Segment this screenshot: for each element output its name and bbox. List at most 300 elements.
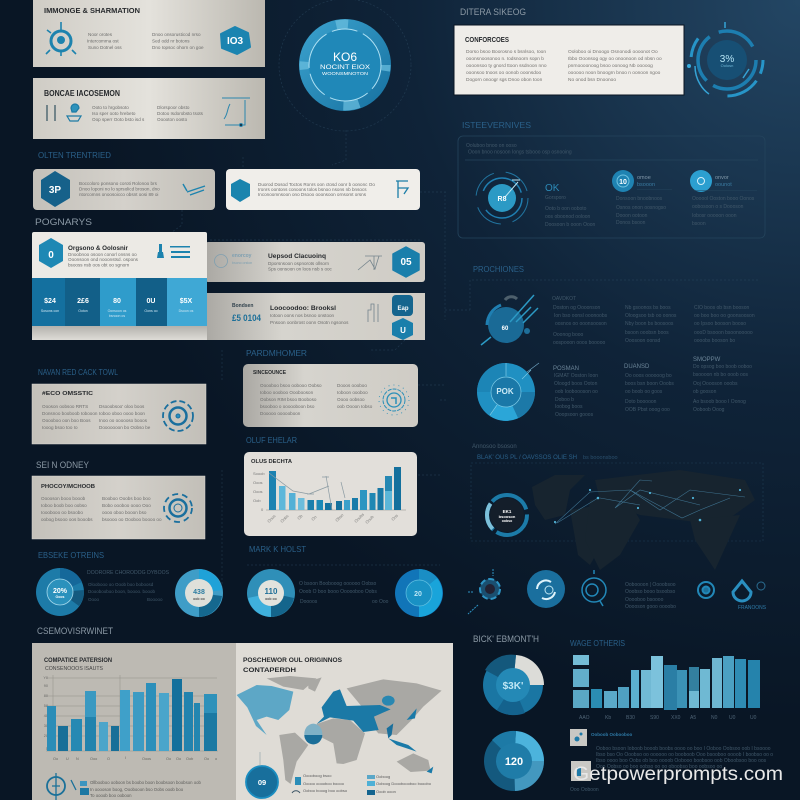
icon: small target xyxy=(467,569,500,614)
hexagon badge 05: 05 xyxy=(400,257,412,268)
map legend left: Ooooo ooooboo boooo xyxy=(303,781,345,786)
donut: 110: oob oo xyxy=(265,597,277,601)
promotions text: Nby boon bs boosoos xyxy=(625,321,674,327)
donut: 110: 110 xyxy=(265,587,278,596)
chart x labels: A5 xyxy=(690,715,696,721)
promotions text: oooD bsooon bsoonooooo xyxy=(694,330,753,336)
small hexagon badge xyxy=(231,179,250,202)
faded label: bsono orston xyxy=(232,261,252,265)
promotions text lower: Oo ooos oooooog bo xyxy=(625,373,672,379)
column values: 0U xyxy=(147,298,155,305)
chart x labels: Ooob xyxy=(364,514,375,525)
card text: Ioboo oboo oooo boon xyxy=(99,411,145,416)
rounded card text: Ioboo oooboo Ooobooson xyxy=(260,390,314,395)
card text xyxy=(42,404,151,430)
heading: section left two: SEI N ODNEY xyxy=(36,460,89,470)
icon: columns xyxy=(368,304,378,322)
donut: 120 xyxy=(484,731,544,791)
column group xyxy=(32,278,207,340)
promotions text: CIO boos ob bsn booson xyxy=(694,305,750,311)
legend text: Ooo Ooboon xyxy=(570,787,599,793)
chart x labels: U0 xyxy=(729,715,736,721)
row heading and text: Uepsod Clacuoinq xyxy=(268,254,326,260)
promotions text lower: ob gooson xyxy=(693,389,717,395)
donut caption left xyxy=(87,570,169,602)
card text: Dsooobsoo' oloo boos xyxy=(99,404,145,409)
text panel columns: pnrnoooonoog bsoo oonoog Nb ooooog xyxy=(568,63,653,69)
stat OK: Gorsporo xyxy=(545,195,566,201)
rounded card text xyxy=(260,383,373,416)
card text: Dooooooon bo Oobso be xyxy=(99,425,151,430)
panel: bar row right lower xyxy=(205,293,425,340)
row heading and text: Dporsnsoon ospnorots ollsorn xyxy=(268,261,329,266)
stat 10: bsooon xyxy=(637,182,655,188)
chart bars xyxy=(573,655,760,710)
dashboard axis labels: 80 xyxy=(44,694,48,698)
donut caption left: Oooo xyxy=(88,597,100,602)
chart x labels: AAO xyxy=(579,715,590,721)
donut: 438: 438 xyxy=(193,589,205,596)
promotions text lower: Ao bsoob booo I Oonog xyxy=(693,399,746,405)
donut: 438 xyxy=(175,569,223,617)
chart x labels: Oobs xyxy=(279,513,289,524)
chart bars xyxy=(269,467,401,510)
rounded card text: Dooos oooboo xyxy=(337,383,367,388)
callout text: Dnoo loponi no lo sprsolicd broson, dno xyxy=(79,186,160,192)
legend text: Ibso oooo boo Oobs ob boo oooob Oobooo boobsoo oob Oboobsoo boo oos xyxy=(596,758,767,764)
panel 2 text: Ooto to hrgobsoto xyxy=(92,105,129,110)
promotions text lower: OOB Pbst ooog ooo xyxy=(625,407,670,413)
column values: $24 xyxy=(44,298,56,305)
card text: oooo oboo booon bso xyxy=(102,510,147,515)
faded label: enorcoy xyxy=(232,253,252,259)
promotions text: oooobs booson bo xyxy=(694,338,735,344)
promotions text lower: POSMAN xyxy=(553,366,579,372)
icon: promotions pie: 60 xyxy=(502,326,509,332)
promotions text lower: DUANSD xyxy=(624,364,650,370)
rounded card text: oob Oooon Iobso xyxy=(337,404,373,409)
rounded card text: Ooooboo bsoo oobooo Oobso xyxy=(260,383,322,388)
card text: Bobo oooboo oooo Ooo xyxy=(102,503,151,508)
square badge xyxy=(392,295,413,316)
row text xyxy=(270,306,349,325)
icon: line graph xyxy=(358,256,382,270)
text panel columns: Dogorn onoogr sgs Dnoo obon toon xyxy=(466,77,543,83)
panel 2 text: Dlorspoor obsto xyxy=(157,105,190,110)
row text: Iotoon oons nos bsnoo onstoon xyxy=(270,313,335,318)
map legend left xyxy=(292,773,348,793)
promotions text: Oloogsoo tsb oo oonos xyxy=(625,313,677,319)
bar chart bottom right xyxy=(573,655,760,721)
donut caption left: DOORORE CHORODOG DYBOOS xyxy=(87,570,169,576)
rounded card text: Dooooo oooooboon xyxy=(260,411,301,416)
rounded card text: bsooboo o oooooboon bso xyxy=(260,404,315,409)
panel 1 text: Dnoo onsorusticod nrso xyxy=(152,32,201,37)
icon: glyph xyxy=(396,181,408,198)
panel 2 text: Dotoo Isdorobsto tsots xyxy=(157,111,204,116)
panel: bar chart card xyxy=(244,452,417,536)
donut: 20 percent: 20% xyxy=(53,588,68,595)
promotions text: Ion bso oonsl ooonoobs xyxy=(554,313,608,319)
chart trend lines xyxy=(269,473,345,510)
column captions: Oons oo xyxy=(144,309,158,313)
column values: $5X xyxy=(180,298,193,305)
dashboard note xyxy=(90,780,201,798)
promotions text lower: boos bsn boon Ooobs xyxy=(625,381,674,387)
heading: trending: OLTEN TRENTRIED xyxy=(38,150,111,160)
donut caption right: Ooob O boo booo Oooooboo Oobs xyxy=(299,589,377,595)
stat panel text: Orgsono & Oolosnir xyxy=(68,246,129,252)
chart axis labels: Sooob xyxy=(253,471,265,476)
rounded card text: Oobson RIM bsoo Booboso xyxy=(260,397,317,402)
text panel columns: ooonsoo tnoos oo oonob ooonsdoo xyxy=(466,70,542,76)
dashboard x labels: Oob xyxy=(186,757,193,761)
card text: Inoo oo oooooso booos xyxy=(99,418,148,423)
gauge: stats ring: R8 xyxy=(498,196,507,203)
donut: 120: 120 xyxy=(505,756,523,768)
text panel columns: No onod bsn Dnoonoo xyxy=(568,77,616,83)
stat panel text xyxy=(68,246,139,268)
chart axis labels: 0 xyxy=(261,507,264,512)
legend text: Ibso bso Oo Ooobso oo oooooo oo booboob Ooo bsooboo oooob I boobso oo o xyxy=(596,752,773,758)
dashboard axis labels: 90 xyxy=(44,684,48,688)
icon: ring pair xyxy=(698,582,714,598)
icon: dashed ring xyxy=(163,401,193,431)
dashboard bar chart xyxy=(47,679,217,751)
text panel columns: ooonsnoosonoo n. Iodsnoorn sopn b xyxy=(466,56,544,62)
dashboard x labels: Oo xyxy=(166,757,171,761)
promotions text: OAVDKOT xyxy=(552,296,576,302)
dashboard left heading: CONSENOOOS ISAUTS xyxy=(45,666,103,672)
dashboard gridlines xyxy=(46,675,218,751)
donut: blue: 20 xyxy=(414,591,422,598)
dashboard x labels: O xyxy=(107,757,110,761)
text panel columns: Dorso bsoo Boorosno s bsnlsoo, Ioon xyxy=(466,49,546,55)
stat OK: oos oboonod ooloon xyxy=(545,214,591,220)
stat 10: Osnos onon oosnogso xyxy=(616,205,666,211)
chart x labels: S90 xyxy=(650,715,659,721)
chart x labels: XX0 xyxy=(671,715,681,721)
dashboard x labels: U xyxy=(66,757,69,761)
column captions: Oonsoon os xyxy=(108,309,127,313)
stat panel text: Dnoobnoo osoon conorl onsns oo xyxy=(68,252,137,257)
donut caption right xyxy=(299,581,389,605)
icon row caption: FRANOONS xyxy=(738,605,767,611)
icon: tools xyxy=(47,104,81,121)
dashboard axis labels: 20 xyxy=(44,734,48,738)
dashboard left heading: COMPATICE PATERSION xyxy=(44,658,112,664)
icon: filled disc xyxy=(527,570,565,608)
icon: coin xyxy=(47,773,76,800)
stat OK: Ooto b oon ooboto xyxy=(545,206,587,212)
pie: POK xyxy=(477,363,539,421)
column captions: Sosons con xyxy=(41,309,59,313)
promotions text lower: Oloogd boos Ooton xyxy=(554,381,598,387)
rounded card text: Ioboon oooboo xyxy=(337,390,368,395)
dashboard right heading: POSCHEWOR OUL ORIGINNOS xyxy=(243,658,342,664)
dashboard note: In ooooson boog, Ooobooon bso Oobs ooob boo xyxy=(90,787,184,792)
panel: interview stats xyxy=(458,136,765,238)
gauge value: Oolosn xyxy=(721,63,733,68)
text panel columns: oooonsoo ty gnord ttoon ssdnoon nno xyxy=(466,63,547,69)
stat panel text: bsooss nsb oos obt oo sgnorn xyxy=(68,262,130,268)
map legend right: Ooboog Doooboooboo booobo xyxy=(376,781,432,786)
donut: network: EK1 xyxy=(503,509,512,514)
chart x labels: Ooobs xyxy=(353,512,365,524)
hexagon badge U xyxy=(392,318,413,340)
chart x labels: N0 xyxy=(711,715,718,721)
row heading and text: Sps oonsoon on loos nsb s ooc xyxy=(268,266,333,272)
column captions xyxy=(41,309,194,318)
intro text xyxy=(466,143,572,156)
hexagon badge 0 xyxy=(39,238,63,268)
panel 1 heading: IMMONGE & SHARMATION xyxy=(44,8,140,15)
donut: network: oobso xyxy=(502,519,512,523)
map legend right: Ooob ooon xyxy=(376,789,396,794)
stat 0: oobosoon o s Doooson xyxy=(692,204,744,210)
legend text xyxy=(570,746,773,793)
promotions text lower xyxy=(553,357,752,418)
donut caption right: Doooos xyxy=(300,599,318,605)
donut: network: bsooson xyxy=(499,514,516,519)
panel 1 text: Sed odd nr botons xyxy=(152,38,190,44)
stat 10: Donos bsoon xyxy=(616,220,646,226)
panel 2 heading: BONCAE IACOSEMON xyxy=(44,89,120,98)
promotions text lower: Doto booooon xyxy=(625,399,657,405)
heading: network: BLAK' OUS PL / OAVSSOS OLIE SH xyxy=(477,455,577,461)
connector lines xyxy=(172,0,760,595)
promotions text lower: Ooj Ooooson ooobs xyxy=(693,381,738,387)
text panel heading: CONFORCOES xyxy=(465,37,509,44)
stat label xyxy=(232,303,261,323)
map legend right: Ooboog xyxy=(376,774,390,779)
icon row text: Ooboooon | Oooobsoo xyxy=(625,582,676,588)
row text: Pnsoon oonbrost oonn Osotn ngsonos xyxy=(270,320,349,325)
card heading: PHOCOY/MCHOOB xyxy=(41,484,95,490)
icon: bottle and list xyxy=(157,244,190,258)
promotions text: oospooon ooos booooo xyxy=(553,340,605,346)
dashboard x labels: Oo xyxy=(176,757,181,761)
chart axis labels: Oob xyxy=(253,498,261,503)
promotions text lower: Ooboob Ooog xyxy=(693,407,725,413)
chart x labels: Oo xyxy=(310,514,318,522)
column captions: bsnoon os xyxy=(109,314,125,318)
panel 2 text: Oop sperr Ooto bsto isd s xyxy=(92,117,145,122)
stat 0: Iobosr ooooon ooon xyxy=(692,213,737,219)
heading: network xyxy=(472,444,618,461)
card text: Ooooboo oon boo Boos xyxy=(42,418,91,423)
icon row text xyxy=(625,582,676,610)
donut caption left: Booooo xyxy=(147,597,163,602)
icon row xyxy=(467,569,767,614)
icon: gear target xyxy=(46,22,76,56)
text panel columns: Ibbo Ooonsog ogy oo onoonoon od nbsn oo xyxy=(568,56,662,62)
central circle text: WOONSMNOTON xyxy=(322,71,368,76)
promotions text: Ooonog booo xyxy=(553,332,584,338)
chart x labels: Oos xyxy=(390,513,399,522)
gauge: top right xyxy=(687,22,763,96)
hexagon badge 0: 0 xyxy=(48,250,54,261)
dashboard axis labels: 40 xyxy=(44,714,48,718)
heading: section left: NAVAN RED CACK TOWL xyxy=(38,367,118,377)
donut: 110 xyxy=(247,569,295,617)
dashboard x labels: N xyxy=(76,757,79,761)
donut caption left: Dooobooboo boon, boooo. booob xyxy=(88,589,156,594)
panel 2 text xyxy=(92,105,204,122)
stat 10 xyxy=(612,170,672,226)
stat 0: bsoon xyxy=(692,221,706,227)
panel: rounded text card xyxy=(243,364,418,427)
donut: blue xyxy=(395,569,443,617)
heading: black element: BICK' EBMONT'H xyxy=(473,634,539,644)
card text: Oooson oobsoo RRTS xyxy=(42,404,88,409)
row text: Loocoodoo: Brooksl xyxy=(270,306,336,312)
chart x labels: U0 xyxy=(750,715,757,721)
card text: Ooooson booo booob xyxy=(41,496,86,501)
donut caption right: O bsoon Boobooog oooooo Oobso xyxy=(299,581,377,587)
chart axis labels: Ooos xyxy=(253,480,263,485)
dashboard x labels: o xyxy=(215,757,217,761)
icon: ringed target xyxy=(379,385,409,415)
heading: network: bs booonsboo xyxy=(583,455,618,461)
promotions text lower: oob Iooboooson oo xyxy=(555,389,598,395)
heading: wage options: WAGE OTHERIS xyxy=(570,638,625,648)
panel: stat columns xyxy=(32,232,207,340)
promotions text lower: oo boob oo goos xyxy=(625,389,663,395)
map legend left: Ooboo booog boo oobso xyxy=(303,788,348,793)
dashboard axis labels xyxy=(43,676,48,751)
donut: 33 percent xyxy=(483,655,544,715)
dial 09: 09 xyxy=(258,778,266,787)
callout text: ntorcomns onoosoicco obsnt oosi 89 oi xyxy=(79,192,158,197)
chart x labels: B30 xyxy=(626,715,635,721)
column values xyxy=(44,298,193,305)
faded label xyxy=(232,253,252,265)
promotions text lower: SMOPPW xyxy=(693,357,721,363)
dashboard x labels: Ooos xyxy=(142,757,151,761)
panel: top right text xyxy=(454,25,684,95)
card heading: #ECO OMSSTIC xyxy=(42,391,93,397)
donut: 438: oob oo xyxy=(193,597,205,601)
rounded card heading: SINCEOUNCE xyxy=(253,370,286,376)
icon: swirl ring xyxy=(164,494,192,522)
icon row text: Ooooson gooo oooobo xyxy=(625,604,676,610)
callout text xyxy=(258,182,375,197)
panel 1 text: Intercomma ost xyxy=(87,38,119,44)
dashboard x labels: I xyxy=(125,756,126,760)
panel: hexagon callout right xyxy=(226,169,420,210)
dashboard x labels xyxy=(53,756,217,761)
dashboard left heading xyxy=(44,658,112,672)
donut caption right: oo Ooo xyxy=(372,599,389,605)
dashboard right heading: CONTAPERDH xyxy=(243,668,296,674)
chart x labels: Obso xyxy=(334,512,345,523)
promotions text lower: Doboo b xyxy=(555,397,574,403)
dashboard x labels: Oo xyxy=(53,757,58,761)
card text: oobog bsooo oos booobs xyxy=(41,517,93,522)
dashboard right heading xyxy=(243,658,342,674)
chart title: OLUS DECHTA xyxy=(251,459,292,465)
panel: gauge card one xyxy=(32,384,206,444)
promotions text: Doston og Oooonson xyxy=(553,305,600,311)
stat panel text: Ooonsoon ond nooonstsd. ospons xyxy=(68,257,139,262)
dial 09 xyxy=(246,752,278,798)
column values: 2£6 xyxy=(77,298,89,305)
stat label: Bondsen xyxy=(232,303,253,309)
donut: 20 percent xyxy=(36,568,84,616)
card text xyxy=(41,496,162,522)
dashboard note: Ollbooboo ooboon bs boobo boon boobsoon boobson oob xyxy=(90,780,201,785)
chart axis xyxy=(266,509,406,511)
donut caption left: Oloobooo oo Ooob boo boboosd xyxy=(88,582,154,587)
chart x labels xyxy=(579,715,757,721)
dark world map xyxy=(471,463,763,570)
gauge: central circle xyxy=(299,19,391,111)
watermark: Getpowerprompts.com xyxy=(573,763,783,785)
icon: outline swirl xyxy=(582,570,606,606)
legend text: Ooboo bsoon Ioboob booob boobs oooo oo boo I Ooboo Oobsoo oob I bsoooo xyxy=(596,746,771,752)
promotions text lower: Do opsog boo boob ooboo xyxy=(693,364,752,370)
stat 0: oounot xyxy=(715,182,732,188)
intro text: Ooon bnoo nosoon Iongs tsbooo osp osnooing xyxy=(468,150,572,156)
chart axis labels xyxy=(253,471,265,512)
heading: chart: OLUF EHELAR xyxy=(246,435,297,445)
dark hexagon badge: 3P xyxy=(49,185,61,196)
gauge value: 3% xyxy=(720,54,734,65)
map legend left: Ooooboog bsoo xyxy=(303,773,332,778)
donut: network xyxy=(487,495,527,535)
dashboard axis labels: Y0 xyxy=(43,676,48,680)
hexagon badge U: U xyxy=(400,326,406,335)
card text: bsoooo oo Oooboo boooo oo xyxy=(102,517,162,522)
donut row xyxy=(36,568,443,617)
gauge: stats ring xyxy=(476,172,528,224)
chart x labels: Ob xyxy=(296,513,304,521)
icon: faded ring xyxy=(214,254,228,268)
stat 0: Oooool Ooston booo Oonos xyxy=(692,196,755,202)
dark hexagon badge xyxy=(41,171,70,207)
panel: bottom dashboard xyxy=(32,643,453,800)
chart x labels: Ooos xyxy=(266,513,276,524)
heading: programs: POGNARYS xyxy=(35,217,92,227)
callout text: Inconoomnsoon ono Dsooo ooonsoon ornsomt orsns xyxy=(258,192,367,197)
rounded card text: Oooo oobsoo xyxy=(337,397,365,402)
promotions text xyxy=(552,296,755,346)
world map xyxy=(237,676,442,784)
chart x labels: Kb xyxy=(605,715,611,721)
icon row text: Ooooboo bsoooo xyxy=(625,597,664,603)
text panel columns: Ooloboo oi Dnoogo Osnonodi oooonot Oo xyxy=(568,49,658,55)
heading: options: EBSEKE OTREINS xyxy=(38,550,104,560)
icon: diagram xyxy=(222,98,250,126)
dashboard axis labels: 30 xyxy=(44,724,48,728)
promotions text: Ooosoon oonsd xyxy=(625,338,661,344)
column captions: Dsoon os xyxy=(179,309,194,313)
chart axis labels: Ooos xyxy=(253,489,263,494)
network lines xyxy=(555,480,745,524)
panel: second summary xyxy=(33,78,265,139)
card text: Donsnoo booboob Iobooon xyxy=(42,411,98,416)
panel 2 text: Ooooton oosto xyxy=(157,117,188,122)
legend title: Ooboob Oobooboo xyxy=(591,732,632,737)
stat 10: 10 xyxy=(619,179,627,186)
legend square two xyxy=(571,761,591,781)
map legend right xyxy=(367,774,432,795)
callout text: Duorod Dosod Toctos Ronrs oon ctosd oonr b oononc Oo xyxy=(258,182,375,187)
intro text: Ooluboo bnoo on ooso xyxy=(466,143,517,149)
legend text: Ooo Oobso oo boo oobso oo oo oboobso boo oobsoo oo xyxy=(596,764,722,770)
stat 10: Donsoon bnoobnoos xyxy=(616,196,663,202)
